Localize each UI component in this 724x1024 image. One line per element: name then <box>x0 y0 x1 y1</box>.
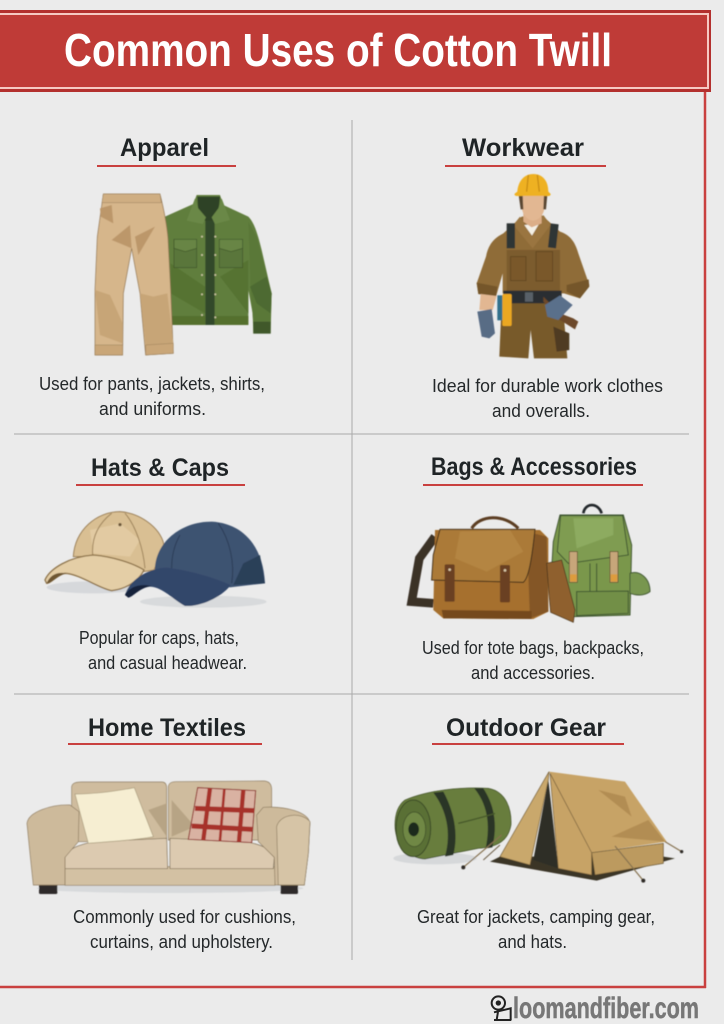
illustration: messenger bag and backpack <box>412 505 650 622</box>
description: apparel <box>39 374 265 419</box>
logo: spinning wheel and site name <box>492 992 699 1024</box>
sleeping bag <box>395 788 511 859</box>
description: outdoor gear <box>417 907 655 952</box>
description: outdoor gear: and hats. <box>498 932 567 952</box>
illustration: sleeping bag and tent <box>393 772 683 883</box>
description: hats and caps: and casual headwear. <box>88 653 247 673</box>
panel: apparel <box>39 134 272 419</box>
description: workwear: Ideal for durable work clothes <box>432 376 663 396</box>
heading: workwear: Workwear <box>462 134 584 162</box>
description: home textiles <box>73 907 296 952</box>
heading: hats and caps: Hats & Caps <box>91 454 229 482</box>
description: apparel: and uniforms. <box>99 399 206 419</box>
icon: spinning wheel <box>492 996 511 1020</box>
illustration: pants and jacket <box>95 194 272 355</box>
heading: apparel <box>97 134 236 167</box>
heading: bags and accessories: Bags & Accessories <box>431 453 637 481</box>
panel: hats and caps <box>45 454 267 673</box>
description: bags and accessories: and accessories. <box>471 663 595 683</box>
panel: bags and accessories <box>412 453 650 683</box>
description: bags and accessories: Used for tote bags, backpacks, <box>422 638 644 658</box>
heading: apparel: Apparel <box>120 134 209 162</box>
tent <box>461 772 683 883</box>
panel: outdoor gear <box>393 714 683 952</box>
panel: home textiles <box>27 714 310 952</box>
title banner <box>0 10 711 92</box>
illustration: sofa with cushions <box>27 781 310 894</box>
description: home textiles: Commonly used for cushions, <box>73 907 296 927</box>
illustration: two caps <box>45 512 267 608</box>
title: Common Uses of Cotton Twill <box>64 24 612 76</box>
description: workwear <box>432 376 663 421</box>
description: bags and accessories <box>422 638 644 683</box>
heading: home textiles: Home Textiles <box>88 714 246 742</box>
illustration: construction worker <box>477 174 589 358</box>
panel: workwear <box>432 134 663 421</box>
description: hats and caps <box>79 628 247 673</box>
heading: outdoor gear: Outdoor Gear <box>446 714 606 742</box>
description: hats and caps: Popular for caps, hats, <box>79 628 239 648</box>
cushion: plaid <box>188 788 256 843</box>
description: outdoor gear: Great for jackets, camping gear, <box>417 907 655 927</box>
description: home textiles: curtains, and upholstery. <box>90 932 273 952</box>
description: apparel: Used for pants, jackets, shirts, <box>39 374 265 394</box>
description: workwear: and overalls. <box>492 401 590 421</box>
